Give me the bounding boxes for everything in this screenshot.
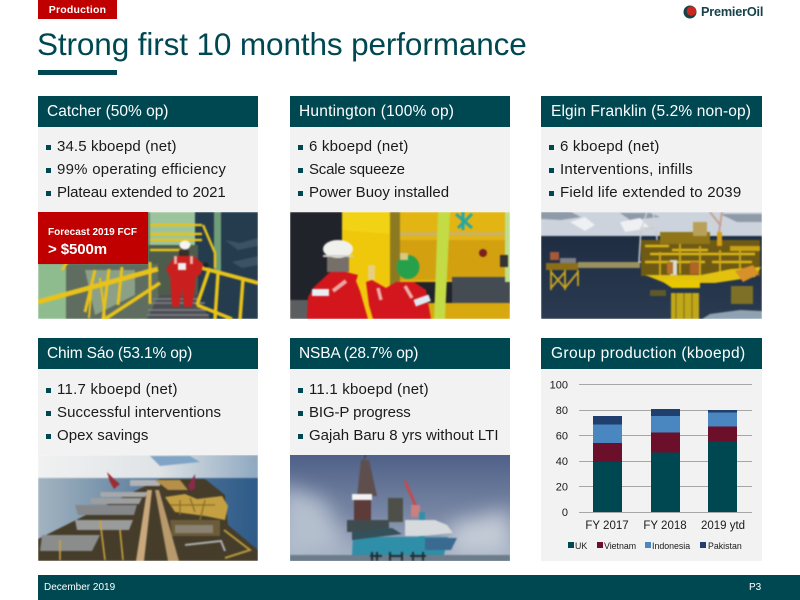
- y axis labels: 80: [556, 405, 568, 417]
- bullet list: Huntington: 6 kboepd (net): [309, 138, 409, 155]
- callout: Forecast 2019 FCF: [38, 212, 148, 264]
- photo: jack-up drilling rig: [290, 455, 510, 561]
- callout: Forecast 2019 FCF: Forecast 2019 FCF: [48, 227, 137, 238]
- bullet list: Catcher: [38, 127, 258, 212]
- header: Elgin Franklin: [541, 96, 762, 127]
- y axis labels: 60: [556, 430, 568, 442]
- title underline: [38, 70, 117, 75]
- x axis labels: FY 2018: [643, 520, 687, 532]
- photo: FPSO deck at sea: [38, 455, 258, 561]
- y axis labels: 20: [556, 482, 568, 494]
- bullet list: NSBA: Gajah Baru 8 yrs without LTI: [309, 427, 499, 444]
- header: Group production: Group production (kboepd): [551, 345, 746, 362]
- footer date: December 2019: [44, 582, 115, 593]
- y axis labels: 40: [556, 456, 568, 468]
- bar: 2019 ytd: [708, 410, 737, 512]
- photo: worker descending yellow stairs: [38, 212, 258, 319]
- panel: Catcher: [38, 96, 258, 319]
- bullet list: Elgin Franklin: [541, 127, 762, 212]
- photo: offshore platform: [541, 212, 762, 319]
- bullet list: Elgin Franklin: 6 kboepd (net): [560, 138, 660, 155]
- y axis labels: 0: [562, 507, 568, 519]
- x axis labels: 2019 ytd: [701, 520, 745, 532]
- header: NSBA: NSBA (28.7% op): [299, 345, 418, 362]
- section tag: Production: [38, 0, 117, 19]
- x axis labels: FY 2017: [585, 520, 629, 532]
- footer bar: [38, 575, 800, 600]
- header: NSBA: [290, 338, 510, 369]
- logo: PremierOil: PremierOil: [701, 5, 763, 19]
- stacked bar chart: [550, 380, 752, 551]
- legend: [568, 541, 742, 551]
- bullet list: Catcher: 99% operating efficiency: [57, 161, 226, 178]
- header: Catcher: [38, 96, 258, 127]
- bullet list: Chim Sáo: 11.7 kboepd (net): [57, 381, 178, 398]
- header: Elgin Franklin: Elgin Franklin (5.2% non-op): [551, 103, 751, 120]
- header: Chim Sáo: Chim Sáo (53.1% op): [47, 345, 192, 362]
- panel: Group production chart: [541, 338, 762, 561]
- header: Catcher: Catcher (50% op): [47, 103, 168, 120]
- legend: Vietnam: [604, 541, 636, 551]
- bullet list: Elgin Franklin: Field life extended to 2039: [560, 184, 741, 201]
- header: Chim Sáo: [38, 338, 258, 369]
- bullet list: NSBA: BIG-P progress: [309, 404, 411, 421]
- bullet list: Catcher: 34.5 kboepd (net): [57, 138, 177, 155]
- bullet list: Catcher: Plateau extended to 2021: [57, 184, 226, 201]
- header: Huntington: [290, 96, 510, 127]
- bullet list: NSBA: [290, 369, 510, 455]
- bullet list: Chim Sáo: Opex savings: [57, 427, 148, 444]
- panel: Huntington: [290, 96, 510, 319]
- callout: Forecast 2019 FCF: > $500m: [48, 241, 107, 258]
- bullet list: Huntington: Power Buoy installed: [309, 184, 449, 201]
- panel: NSBA: [290, 338, 510, 561]
- legend: Pakistan: [708, 541, 742, 551]
- bullet list: Huntington: [290, 127, 510, 212]
- bullet list: NSBA: 11.1 kboepd (net): [309, 381, 429, 398]
- bullet list: Chim Sáo: [38, 369, 258, 455]
- y axis labels: 100: [550, 380, 568, 392]
- header: Huntington: Huntington (100% op): [299, 103, 454, 120]
- section tag: Production: Production: [49, 4, 106, 16]
- title: Strong first 10 months performance: [37, 26, 527, 62]
- bar: FY 2017: [593, 416, 622, 512]
- chart background: [541, 369, 762, 561]
- bullet list: Elgin Franklin: Interventions, infills: [560, 161, 693, 178]
- legend: Indonesia: [652, 541, 690, 551]
- legend: UK: [575, 541, 587, 551]
- y axis labels: [550, 380, 568, 519]
- photo: two workers by yellow power buoy: [290, 212, 510, 319]
- bar: FY 2018: [651, 409, 680, 512]
- x axis labels: [585, 520, 745, 532]
- page number: P3: [749, 582, 761, 593]
- panel: Elgin Franklin: [541, 96, 762, 319]
- header: Group production: [541, 338, 762, 369]
- panel: Chim Sáo: [38, 338, 258, 561]
- bullet list: Chim Sáo: Successful interventions: [57, 404, 221, 421]
- bullet list: Huntington: Scale squeeze: [309, 161, 405, 178]
